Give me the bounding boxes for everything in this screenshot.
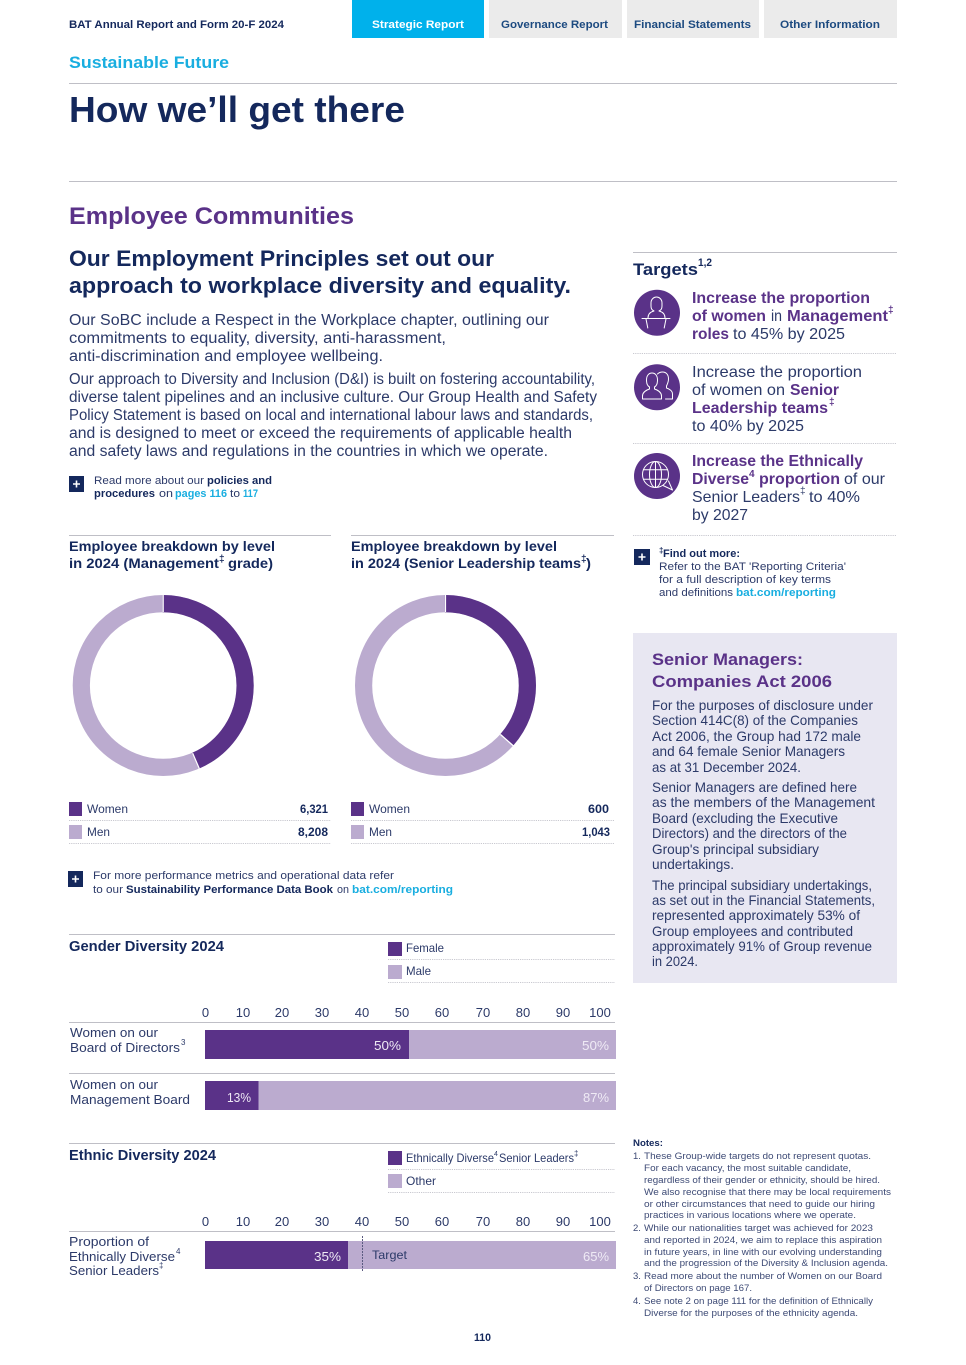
notes: and reported in 2024, we aim to replace this aspiration bbox=[644, 1235, 882, 1246]
notes: These Group-wide targets do not represent quotas. bbox=[644, 1151, 871, 1162]
find out more callout: Refer to the BAT 'Reporting Criteria' bbox=[659, 561, 846, 573]
target 1 text: roles bbox=[692, 326, 729, 343]
panel body text: Group's principal subsidiary bbox=[652, 841, 819, 857]
intro text block: Our approach to Diversity and Inclusion (D&I) is built on fostering accountability, bbox=[69, 371, 595, 388]
legend: Ethnically Diverse bbox=[406, 1151, 494, 1165]
panel body text: Board (excluding the Executive bbox=[652, 810, 838, 826]
target 3 text: proportion bbox=[759, 471, 840, 488]
row: management board: 87% bbox=[583, 1090, 609, 1105]
legend bbox=[388, 941, 615, 982]
find out more callout: for a full description of key terms bbox=[659, 574, 832, 586]
legend: Female bbox=[406, 941, 444, 955]
panel heading: Companies Act 2006 bbox=[652, 672, 832, 691]
chart heading: ) bbox=[586, 555, 591, 571]
legend: Senior Leaders bbox=[499, 1151, 574, 1165]
notes: regardless of their gender or ethnicity, should be hired. bbox=[644, 1175, 880, 1186]
read more callout: 117 bbox=[243, 488, 258, 500]
subheading: approach to workplace diversity and equality. bbox=[69, 273, 571, 298]
chart heading: Employee breakdown by level bbox=[351, 538, 557, 554]
row: management board: Management Board bbox=[70, 1092, 190, 1107]
chart heading bbox=[351, 538, 591, 571]
read more callout: policies and bbox=[207, 475, 272, 487]
legend with values bbox=[69, 802, 331, 844]
axis: 20 bbox=[275, 1005, 289, 1020]
subheading bbox=[69, 246, 571, 298]
row: ethnically diverse senior leaders: 4 bbox=[176, 1247, 181, 1256]
header: report title: BAT Annual Report and Form 20-F 2024 bbox=[69, 19, 285, 31]
panel body text: as at 31 December 2024. bbox=[652, 759, 801, 775]
panel body text: undertakings. bbox=[652, 856, 734, 872]
axis: 0 bbox=[202, 1214, 209, 1229]
panel: management donut bbox=[69, 536, 331, 844]
legend: Other bbox=[406, 1174, 436, 1188]
legend bbox=[388, 1149, 615, 1192]
target 1 text: ‡ bbox=[888, 305, 894, 316]
header navigation tabs bbox=[352, 0, 897, 38]
target 1 text: in bbox=[771, 308, 782, 325]
find out more callout: Find out more: bbox=[663, 548, 740, 560]
section heading: Employee Communities bbox=[69, 203, 354, 230]
axis: 20 bbox=[275, 1214, 289, 1229]
axis: 0 bbox=[202, 1005, 209, 1020]
target 2 text bbox=[692, 364, 862, 435]
targets heading bbox=[633, 257, 712, 279]
target 2 text: Increase the proportion bbox=[692, 364, 862, 381]
axis: 70 bbox=[476, 1214, 490, 1229]
axis: 10 bbox=[236, 1214, 250, 1229]
chart heading: Employee breakdown by level bbox=[69, 538, 275, 554]
panel body text: Section 414C(8) of the Companies bbox=[652, 712, 858, 728]
chart heading: in 2024 (Management bbox=[69, 555, 219, 571]
notes: and the progression of the Diversity & Inclusion agenda. bbox=[644, 1258, 888, 1269]
axis: 50 bbox=[395, 1214, 409, 1229]
targets heading: 1,2 bbox=[698, 257, 712, 269]
chart heading: in 2024 (Senior Leadership teams bbox=[351, 555, 581, 571]
intro text block: and safety laws and regulations in the countries in which we operate. bbox=[69, 443, 548, 460]
intro text block: Our SoBC include a Respect in the Workplace chapter, outlining our bbox=[69, 312, 549, 329]
page number: 110 bbox=[474, 1332, 491, 1344]
read more callout: pages 116 bbox=[175, 488, 227, 500]
target 3 text: 4 bbox=[749, 469, 755, 480]
legend with values: Women bbox=[369, 802, 410, 816]
read more callout: Read more about our bbox=[94, 475, 204, 487]
page title: How we’ll get there bbox=[69, 89, 405, 130]
target 3 text: Senior Leaders bbox=[692, 489, 800, 506]
header navigation tabs: Strategic Report bbox=[372, 19, 464, 31]
target 3 text: ‡ bbox=[800, 486, 806, 497]
axis: 10 bbox=[236, 1005, 250, 1020]
axis: 100 bbox=[589, 1005, 611, 1020]
read more callout bbox=[69, 475, 272, 500]
find out more callout bbox=[634, 546, 846, 599]
legend with values: Men bbox=[87, 825, 110, 839]
row: ethnically diverse senior leaders: Target bbox=[372, 1248, 408, 1262]
notes: We also recognise that there may be local requirements bbox=[644, 1187, 891, 1198]
row: board of directors: Board of Directors bbox=[70, 1040, 181, 1055]
panel heading: Senior Managers: bbox=[652, 650, 803, 669]
panel body text: Group employees and contributed bbox=[652, 923, 853, 939]
axis: 90 bbox=[556, 1214, 570, 1229]
intro text block: and is designed to meet or exceed the requirements of applicable health bbox=[69, 425, 572, 442]
data book callout bbox=[68, 870, 453, 896]
axis: 40 bbox=[355, 1214, 369, 1229]
data book callout: to our bbox=[93, 884, 123, 896]
target 1 text: to 45% by 2025 bbox=[733, 326, 845, 343]
row: board of directors: 50% bbox=[374, 1038, 401, 1053]
target 1 text: Management bbox=[787, 308, 889, 325]
donut chart bbox=[81, 594, 245, 769]
panel body text: approximately 91% of Group revenue bbox=[652, 938, 872, 954]
panel: gender diversity chart bbox=[69, 934, 616, 1110]
header navigation tabs: Other Information bbox=[780, 19, 880, 31]
axis: 80 bbox=[516, 1005, 530, 1020]
row: ethnically diverse senior leaders: Ethnically Diverse bbox=[69, 1249, 175, 1264]
target 1 text: of women bbox=[692, 308, 766, 325]
notes: 1. bbox=[633, 1151, 641, 1162]
notes: While our nationalities target was achieved for 2023 bbox=[644, 1223, 873, 1234]
notes: Diverse for the purposes of the ethnicity agenda. bbox=[644, 1308, 858, 1319]
panel body text: and 64 female Senior Managers bbox=[652, 743, 845, 759]
notes: of Directors on page 167. bbox=[644, 1283, 752, 1294]
data book callout: bat.com/reporting bbox=[352, 884, 453, 896]
find out more callout: and definitions bbox=[659, 587, 734, 599]
axis: 90 bbox=[556, 1005, 570, 1020]
legend: Male bbox=[406, 964, 431, 978]
notes: For each vacancy, the most suitable candidate, bbox=[644, 1163, 851, 1174]
target 2 text: ‡ bbox=[829, 397, 835, 408]
row: ethnically diverse senior leaders: 65% bbox=[583, 1249, 609, 1264]
intro text block: diverse talent pipelines and an inclusive culture. Our Group Health and Safety bbox=[69, 389, 597, 406]
subheading: Our Employment Principles set out our bbox=[69, 246, 494, 271]
intro text block: Policy Statement is based on local and international labour laws and standards, bbox=[69, 407, 593, 424]
row: ethnically diverse senior leaders: ‡ bbox=[159, 1261, 163, 1270]
axis: 70 bbox=[476, 1005, 490, 1020]
donut chart bbox=[364, 594, 527, 767]
legend with values: 1,043 bbox=[582, 825, 610, 839]
axis: 100 bbox=[589, 1214, 611, 1229]
notes: See note 2 on page 111 for the definition of Ethnically bbox=[644, 1296, 873, 1307]
target 3 text: by 2027 bbox=[692, 507, 748, 524]
panel body text: Act 2006, the Group had 172 male bbox=[652, 728, 861, 744]
legend with values: Women bbox=[87, 802, 128, 816]
notes: or other circumstances that need to guide our hiring bbox=[644, 1199, 875, 1210]
icon: woman at lectern bbox=[634, 290, 680, 336]
panel: senior leadership donut bbox=[351, 536, 614, 844]
legend with values: 6,321 bbox=[300, 802, 328, 816]
row: board of directors: 3 bbox=[181, 1038, 186, 1047]
panel body text: Senior Managers are defined here bbox=[652, 779, 857, 795]
chart heading: Ethnic Diversity 2024 bbox=[69, 1148, 216, 1164]
data book callout: Sustainability Performance Data Book bbox=[126, 884, 334, 896]
panel body text: in 2024. bbox=[652, 953, 698, 969]
row: board of directors: 50% bbox=[582, 1038, 609, 1053]
row: ethnically diverse senior leaders: Senior Leaders bbox=[69, 1263, 160, 1278]
target 3 text: to 40% bbox=[809, 489, 860, 506]
panel body text: as the members of the Management bbox=[652, 794, 875, 810]
notes: Read more about the number of Women on our Board bbox=[644, 1271, 882, 1282]
row: ethnically diverse senior leaders: 35% bbox=[314, 1249, 341, 1264]
find out more callout: bat.com/reporting bbox=[736, 587, 836, 599]
notes: in future years, in line with our evolving understanding bbox=[644, 1247, 882, 1258]
axis: 50 bbox=[395, 1005, 409, 1020]
header navigation tabs: Financial Statements bbox=[634, 19, 751, 31]
chart heading: ‡ bbox=[219, 554, 225, 565]
chart heading: Gender Diversity 2024 bbox=[69, 939, 224, 955]
axis: 60 bbox=[435, 1214, 449, 1229]
target 3 text: Diverse bbox=[692, 471, 749, 488]
axis: 30 bbox=[315, 1005, 329, 1020]
notes bbox=[633, 1138, 891, 1319]
row: ethnically diverse senior leaders bbox=[69, 1234, 616, 1278]
axis: 80 bbox=[516, 1214, 530, 1229]
notes: 3. bbox=[633, 1271, 641, 1282]
row: ethnically diverse senior leaders: Proportion of bbox=[69, 1234, 149, 1249]
legend with values: 8,208 bbox=[298, 825, 328, 839]
panel: ethnic diversity chart bbox=[69, 1144, 616, 1278]
row: management board: 13% bbox=[227, 1090, 251, 1105]
icon: two women bbox=[634, 364, 680, 410]
notes: 4. bbox=[633, 1296, 641, 1307]
target 2 text: to 40% by 2025 bbox=[692, 418, 804, 435]
row: board of directors bbox=[70, 1025, 616, 1059]
row: board of directors: Women on our bbox=[70, 1025, 159, 1040]
target 3 text: Increase the Ethnically bbox=[692, 453, 863, 470]
axis: 40 bbox=[355, 1005, 369, 1020]
intro text block: commitments to equality, diversity, anti-harassment, bbox=[69, 330, 446, 347]
target 2 text: Senior bbox=[790, 382, 839, 399]
intro text block: anti-discrimination and employee wellbeing. bbox=[69, 348, 383, 365]
notes: Notes: bbox=[633, 1138, 663, 1149]
panel body text: as set out in the Financial Statements, bbox=[652, 892, 875, 908]
axis: 60 bbox=[435, 1005, 449, 1020]
row: management board bbox=[70, 1077, 616, 1110]
legend with values: 600 bbox=[588, 802, 609, 816]
axis bbox=[202, 1214, 611, 1229]
read more callout: on bbox=[159, 488, 173, 500]
panel body text: For the purposes of disclosure under bbox=[652, 697, 873, 713]
read more callout: procedures bbox=[94, 488, 155, 500]
panel heading bbox=[652, 650, 832, 691]
chart heading: grade) bbox=[228, 555, 273, 571]
target 3 text bbox=[692, 453, 886, 524]
target 1 text: Increase the proportion bbox=[692, 290, 870, 307]
icon: globe with speech tail bbox=[634, 453, 680, 499]
panel body text bbox=[652, 697, 875, 969]
read more callout: to bbox=[230, 488, 240, 500]
find out more callout: ‡ bbox=[659, 546, 663, 555]
notes: 2. bbox=[633, 1223, 641, 1234]
data book callout: on bbox=[337, 884, 349, 896]
legend with values: Men bbox=[369, 825, 392, 839]
panel body text: represented approximately 53% of bbox=[652, 907, 860, 923]
data book callout: For more performance metrics and operational data refer bbox=[93, 870, 394, 882]
section label: Sustainable Future bbox=[69, 53, 229, 72]
target 2 text: Leadership teams bbox=[692, 400, 828, 417]
row: management board: Women on our bbox=[70, 1077, 159, 1092]
panel: targets bbox=[633, 252, 897, 599]
chart heading: ‡ bbox=[581, 554, 587, 565]
panel body text: The principal subsidiary undertakings, bbox=[652, 877, 872, 893]
targets heading: Targets bbox=[633, 260, 698, 279]
intro text block bbox=[69, 312, 597, 460]
target 1 text bbox=[692, 290, 894, 343]
header navigation tabs: Governance Report bbox=[501, 19, 608, 31]
notes: practices in various locations where we operate. bbox=[644, 1210, 856, 1221]
chart heading bbox=[69, 538, 275, 571]
target 2 text: of women on bbox=[692, 382, 785, 399]
axis: 30 bbox=[315, 1214, 329, 1229]
legend: 4 bbox=[494, 1151, 498, 1158]
panel body text: Directors) and the directors of the bbox=[652, 825, 847, 841]
target 3 text: of our bbox=[844, 471, 886, 488]
panel: senior managers bbox=[633, 633, 897, 983]
legend: ‡ bbox=[574, 1149, 578, 1158]
axis bbox=[202, 1005, 611, 1020]
legend with values bbox=[351, 802, 614, 844]
